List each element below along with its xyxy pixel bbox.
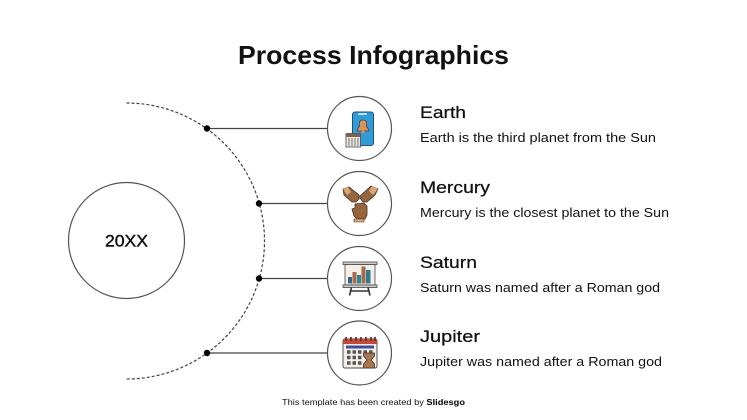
icon circle: Mercury bbox=[328, 172, 392, 236]
dashed arc bbox=[126, 103, 264, 379]
center circle: 20XX: 20XX bbox=[105, 232, 148, 250]
connector: Jupiter bbox=[204, 350, 328, 356]
connector: Earth bbox=[204, 125, 328, 132]
text block: Mercury: Mercury is the closest planet to the Sun bbox=[420, 205, 669, 220]
text block: Jupiter: Jupiter bbox=[420, 327, 480, 346]
text block: Mercury: Mercury bbox=[420, 178, 491, 197]
text block: Earth bbox=[420, 103, 656, 145]
icon circle: Jupiter bbox=[328, 321, 392, 385]
connector: Saturn bbox=[256, 275, 328, 282]
icon: three hands bbox=[343, 186, 378, 222]
icon: calendar with hourglass bbox=[343, 337, 377, 368]
icon circle: Saturn bbox=[328, 246, 392, 310]
title: Process Infographics bbox=[238, 40, 509, 70]
footer credit: This template has been created by Slidesgo bbox=[282, 397, 465, 407]
text block: Jupiter: Jupiter was named after a Roman god bbox=[420, 354, 662, 369]
icon circle: Earth bbox=[328, 96, 392, 160]
icon: presentation board with bar chart bbox=[343, 262, 377, 296]
icon: phone with bell and calendar bbox=[346, 112, 374, 147]
text block: Saturn: Saturn bbox=[420, 253, 477, 272]
connector: Mercury bbox=[256, 200, 328, 207]
text block: Saturn: Saturn was named after a Roman god bbox=[420, 280, 660, 295]
text block: Saturn bbox=[420, 253, 660, 295]
center circle: 20XX bbox=[68, 182, 184, 298]
text block: Jupiter bbox=[420, 327, 662, 369]
text block: Earth: Earth is the third planet from the Sun bbox=[420, 130, 656, 145]
text block: Earth: Earth bbox=[420, 103, 466, 122]
text block: Mercury bbox=[420, 178, 669, 220]
